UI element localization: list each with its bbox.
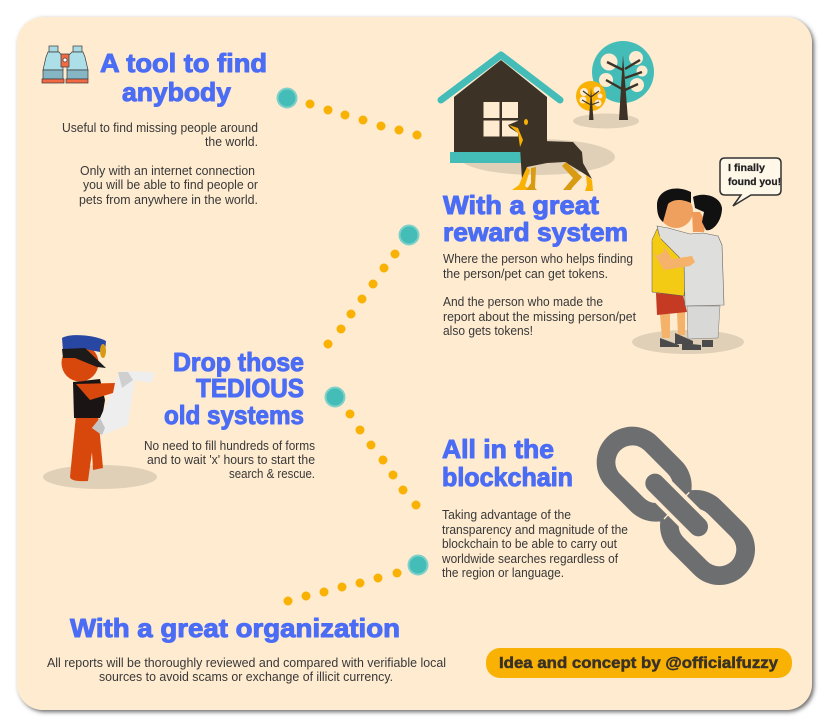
heading: with a great reward system: With a great xyxy=(443,190,599,220)
illustration: dog xyxy=(508,119,593,191)
dotted connector: top xyxy=(278,88,422,140)
heading: all in the blockchain: All in the xyxy=(442,434,554,464)
speech bubble: I finally found you: found you! xyxy=(728,176,781,188)
illustration: officer reading scroll xyxy=(43,335,157,489)
heading: all in the blockchain xyxy=(442,434,573,492)
heading: drop those tedious old systems xyxy=(164,347,304,430)
text block: old systems description: and to wait 'x' hours to start the xyxy=(147,453,315,467)
text block: organization description: sources to avoid scams or exchange of illicit currency. xyxy=(99,670,393,684)
text block: tool description: Useful to find missing people around xyxy=(62,121,258,135)
speech bubble: I finally found you: I finally xyxy=(728,162,765,174)
text block: old systems description: search & rescue. xyxy=(229,467,315,481)
text block: tool description: you will be able to find people or xyxy=(83,178,258,192)
heading: a tool to find anybody xyxy=(100,48,267,107)
text block: old systems description xyxy=(144,439,315,481)
heading: with a great organization: With a great organization xyxy=(70,613,400,643)
text block: tool description xyxy=(62,121,258,207)
heading: a tool to find anybody: A tool to find xyxy=(100,48,267,78)
heading: with a great reward system xyxy=(443,190,628,247)
heading: drop those tedious old systems: Drop those xyxy=(173,347,304,377)
text block: blockchain description: Taking advantage of the xyxy=(442,508,571,522)
text block: blockchain description xyxy=(441,508,628,580)
credit pill: Idea and concept by @officialfuzzy xyxy=(499,655,778,672)
illustration: hugging couple xyxy=(632,188,744,354)
dotted connector: blockchain to organization xyxy=(284,556,428,606)
text block: reward description xyxy=(443,252,637,338)
text block: blockchain description: blockchain to be able to carry out xyxy=(442,537,617,551)
heading: all in the blockchain: blockchain xyxy=(442,462,573,492)
text block: tool description: pets from anywhere in the world. xyxy=(79,193,258,207)
text block: organization description xyxy=(47,656,446,684)
heading: a tool to find anybody: anybody xyxy=(122,77,232,107)
text block: organization description: All reports will be thoroughly reviewed and compared with verifiable local xyxy=(47,656,446,670)
illustration: trees xyxy=(573,41,654,128)
text block: blockchain description: worldwide searches regardless of xyxy=(441,552,618,566)
text block: blockchain description: transparency and magnitude of the xyxy=(442,523,628,537)
heading: drop those tedious old systems: old systems xyxy=(164,400,304,430)
text block: old systems description: No need to fill hundreds of forms xyxy=(144,439,315,453)
text block: blockchain description: the region or language. xyxy=(442,566,564,580)
icon: binoculars xyxy=(42,46,88,83)
text block: tool description: the world. xyxy=(205,135,258,149)
illustration: house xyxy=(441,55,615,175)
text block: reward description: also gets tokens! xyxy=(443,324,533,338)
dotted connector: systems to blockchain xyxy=(326,388,420,510)
text block: reward description: the person/pet can get tokens. xyxy=(443,267,608,281)
icon: chain link xyxy=(632,462,719,549)
credit pill xyxy=(486,648,792,678)
text block: reward description: And the person who made the xyxy=(443,295,603,309)
heading: drop those tedious old systems: TEDIOUS xyxy=(196,373,304,403)
text block: reward description: Where the person who helps finding xyxy=(443,252,633,266)
text block: tool description: Only with an internet connection xyxy=(80,164,255,178)
speech bubble: I finally found you xyxy=(720,158,781,206)
dotted connector: reward to systems xyxy=(324,226,418,348)
heading: with a great reward system: reward system xyxy=(443,217,628,247)
text block: reward description: report about the missing person/pet xyxy=(443,310,637,324)
